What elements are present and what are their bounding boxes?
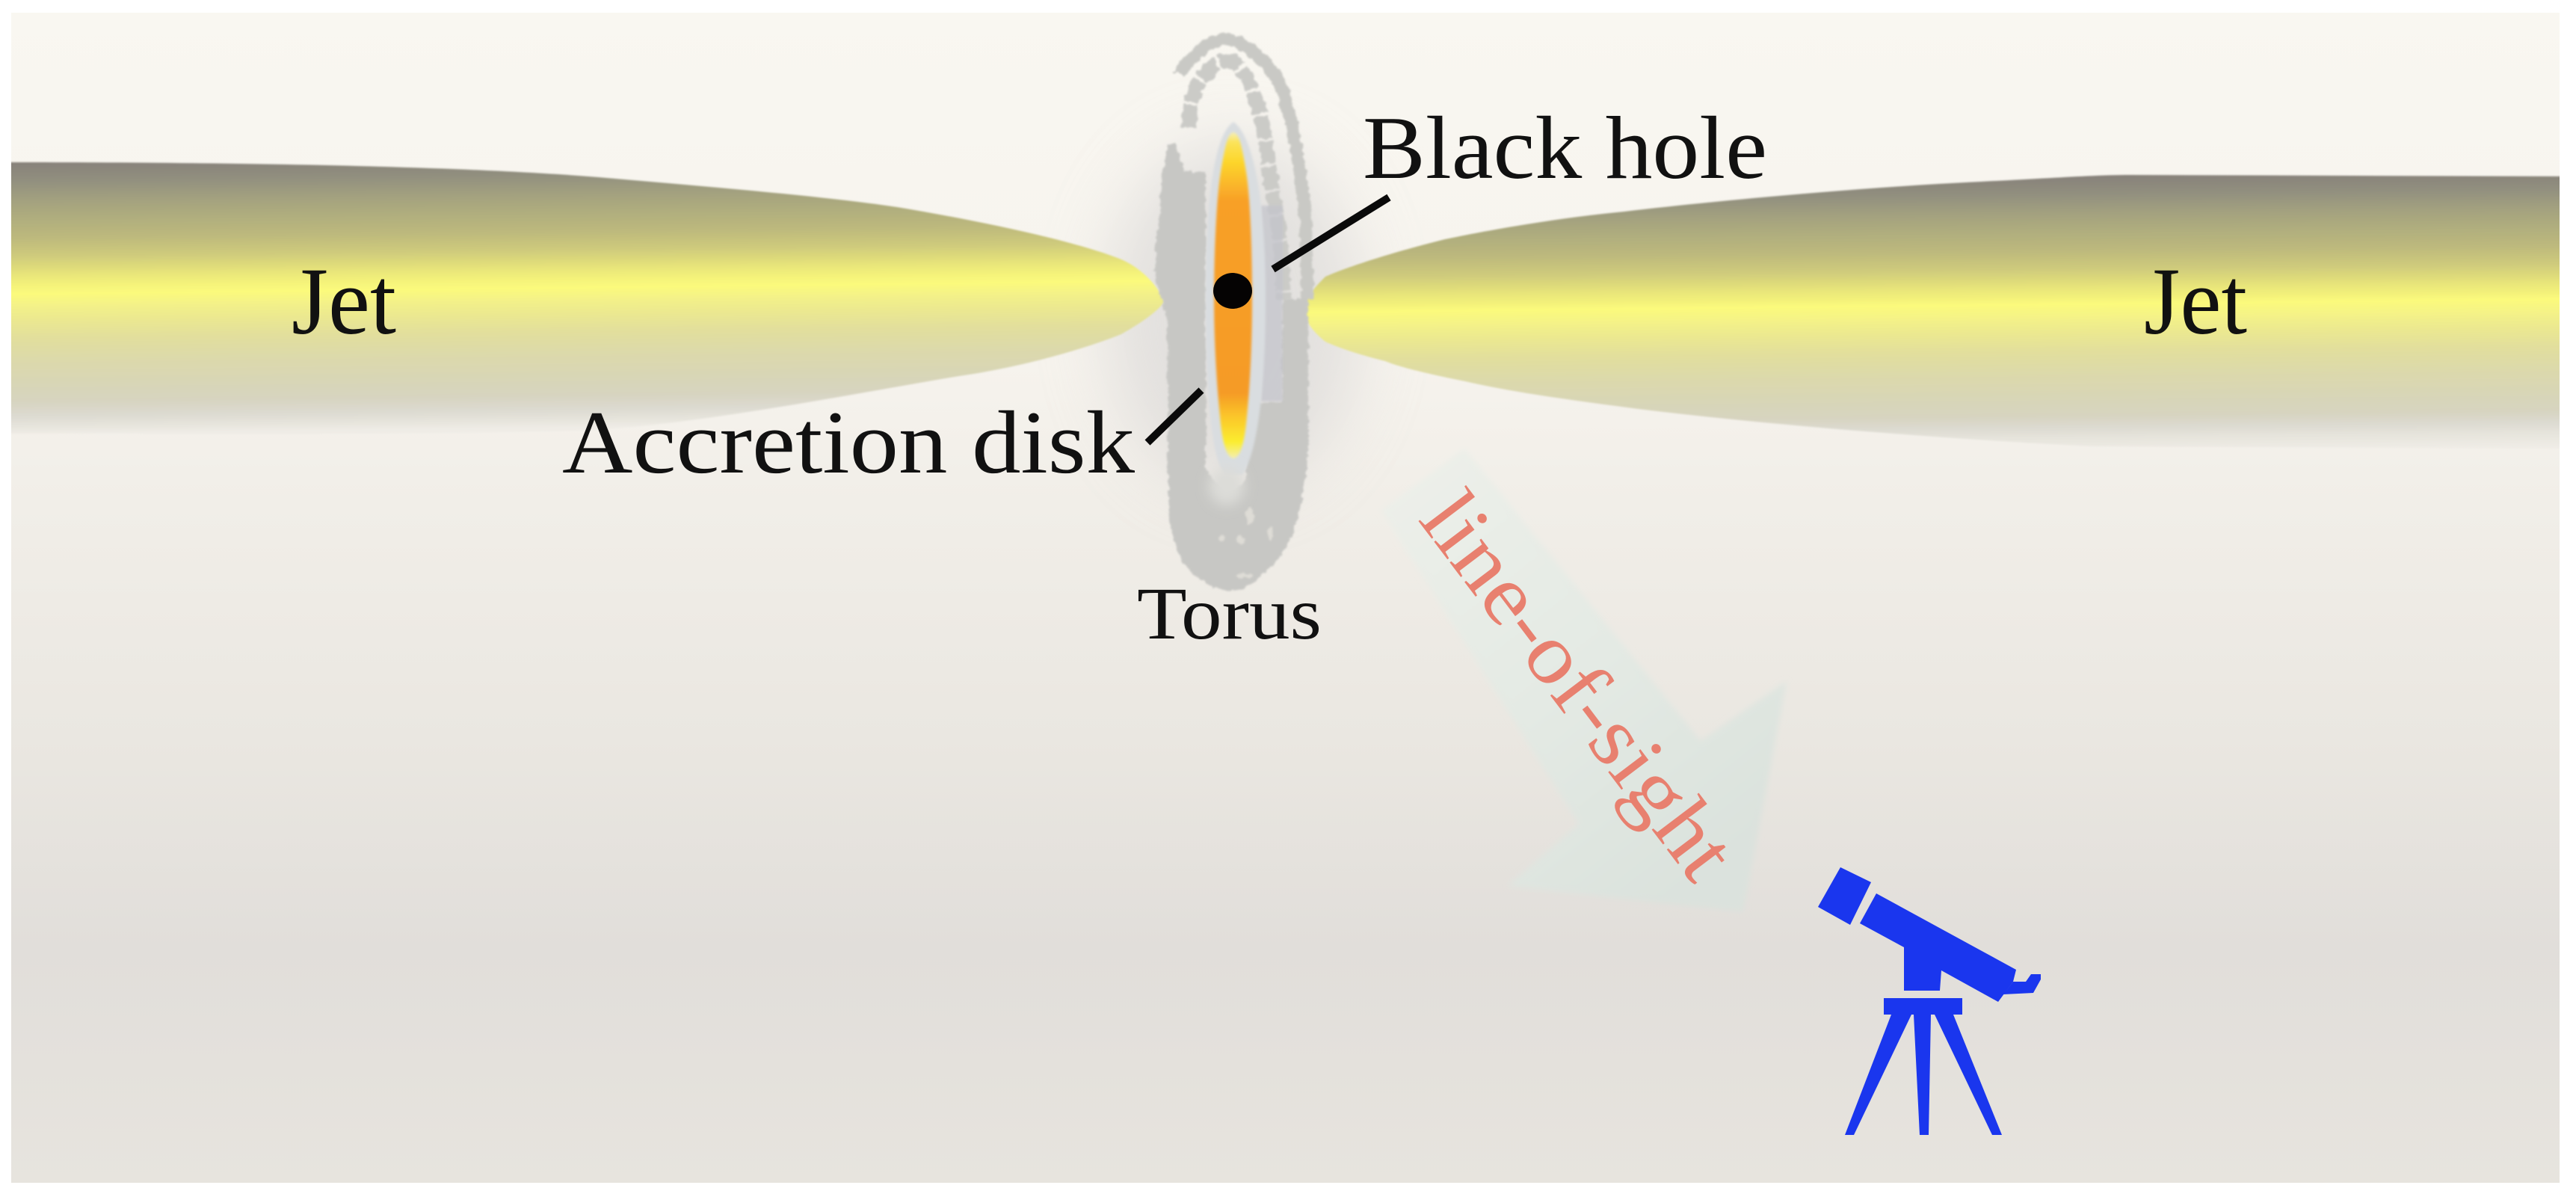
halo around accretion disk [1206,122,1266,475]
leader line: accretion disk [1147,390,1201,443]
arrow: line of sight [1381,449,1787,912]
torus body [1155,144,1308,591]
label: left jet: Jet [292,248,396,354]
torus outer spiral arm [1180,40,1307,299]
left jet [0,162,1165,434]
accretion disk [1214,132,1252,458]
icon: telescope [1818,867,2041,1135]
torus [1155,40,1308,591]
leader line: black hole [1273,197,1389,269]
torus lower speckles [1219,508,1274,578]
telescope centre leg [1914,1015,1931,1135]
telescope eyepiece [2003,974,2041,994]
label: accretion disk: Accretion disk [562,393,1135,492]
label: line-of-sight: line-of-sight [1402,473,1755,897]
telescope left leg [1845,1015,1911,1135]
telescope tube and mount [1860,893,2016,1002]
telescope front cap [1818,867,1871,925]
label: torus: Torus [1137,572,1322,655]
soft glow around the nucleus [1106,142,1361,486]
telescope platform [1884,998,1962,1015]
torus inner spiral arm [1189,61,1284,299]
torus inner right stripes [1260,206,1283,401]
right jet [1303,175,2576,449]
pale fade below accretion disk [1209,467,1245,505]
label: black hole: Black hole [1363,98,1767,197]
black hole [1213,273,1252,309]
label: right jet: Jet [2144,248,2247,354]
telescope right leg [1935,1015,2002,1135]
